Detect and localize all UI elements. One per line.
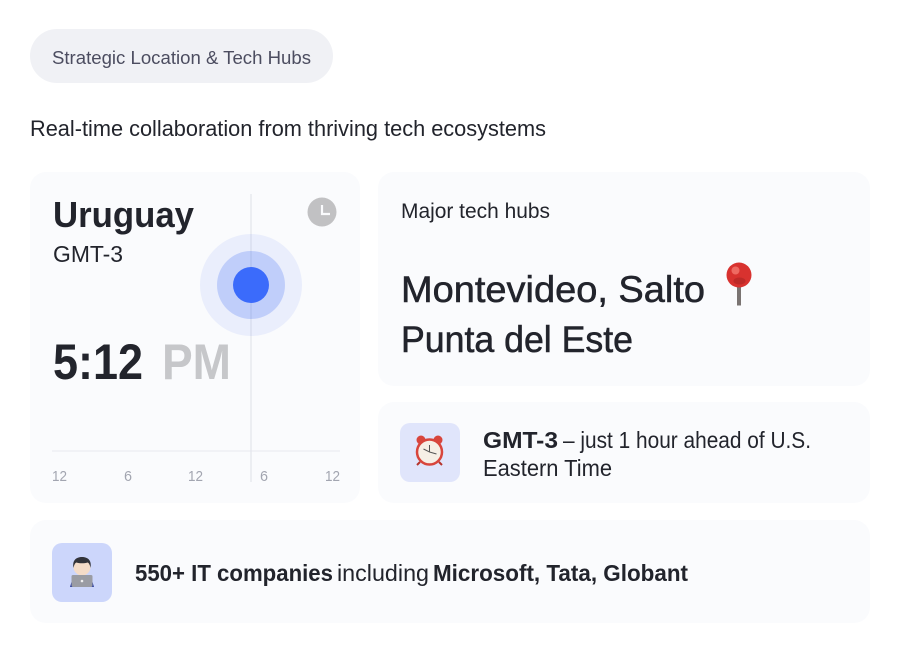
time: PM: [162, 334, 231, 390]
icon: pushpin: [726, 262, 752, 306]
city names: [401, 269, 705, 360]
city names: Punta del Este: [401, 319, 633, 360]
panel: IT companies: [30, 520, 870, 623]
panel: major tech hubs: [378, 172, 870, 386]
icon: clock: [308, 198, 336, 226]
timeline labels: [52, 468, 340, 485]
badge: section label: Strategic Location & Tech Hubs: [52, 48, 311, 68]
companies text: 550+ IT companies: [135, 560, 333, 586]
panel label: Major tech hubs: [401, 200, 550, 223]
timeline labels: 6: [260, 468, 268, 485]
panel: time difference: [378, 402, 870, 503]
badge: section label: [30, 29, 333, 83]
icon: alarm clock: [400, 423, 460, 482]
companies text: [135, 560, 688, 586]
time: 5:12: [53, 334, 143, 390]
timeline labels: 12: [52, 468, 67, 485]
icon: technologist: [52, 543, 112, 602]
country name: Uruguay: [53, 194, 194, 235]
time difference text: GMT-3: [483, 427, 558, 453]
timeline labels: 6: [124, 468, 132, 485]
panel: Uruguay clock: [30, 172, 360, 503]
current time marker: [200, 234, 302, 336]
companies text: including: [337, 560, 429, 586]
timeline labels: 12: [188, 468, 203, 485]
subtitle: Real-time collaboration from thriving tech ecosystems: [30, 116, 546, 141]
timezone: GMT-3: [53, 241, 123, 267]
companies text: Microsoft, Tata, Globant: [433, 560, 688, 586]
time difference text: [483, 427, 811, 481]
timeline axis: [52, 194, 340, 482]
time difference text: Eastern Time: [483, 455, 612, 481]
city names: Montevideo, Salto: [401, 269, 705, 310]
time difference text: – just 1 hour ahead of U.S.: [563, 427, 811, 453]
time: [53, 334, 231, 390]
timeline labels: 12: [325, 468, 340, 485]
